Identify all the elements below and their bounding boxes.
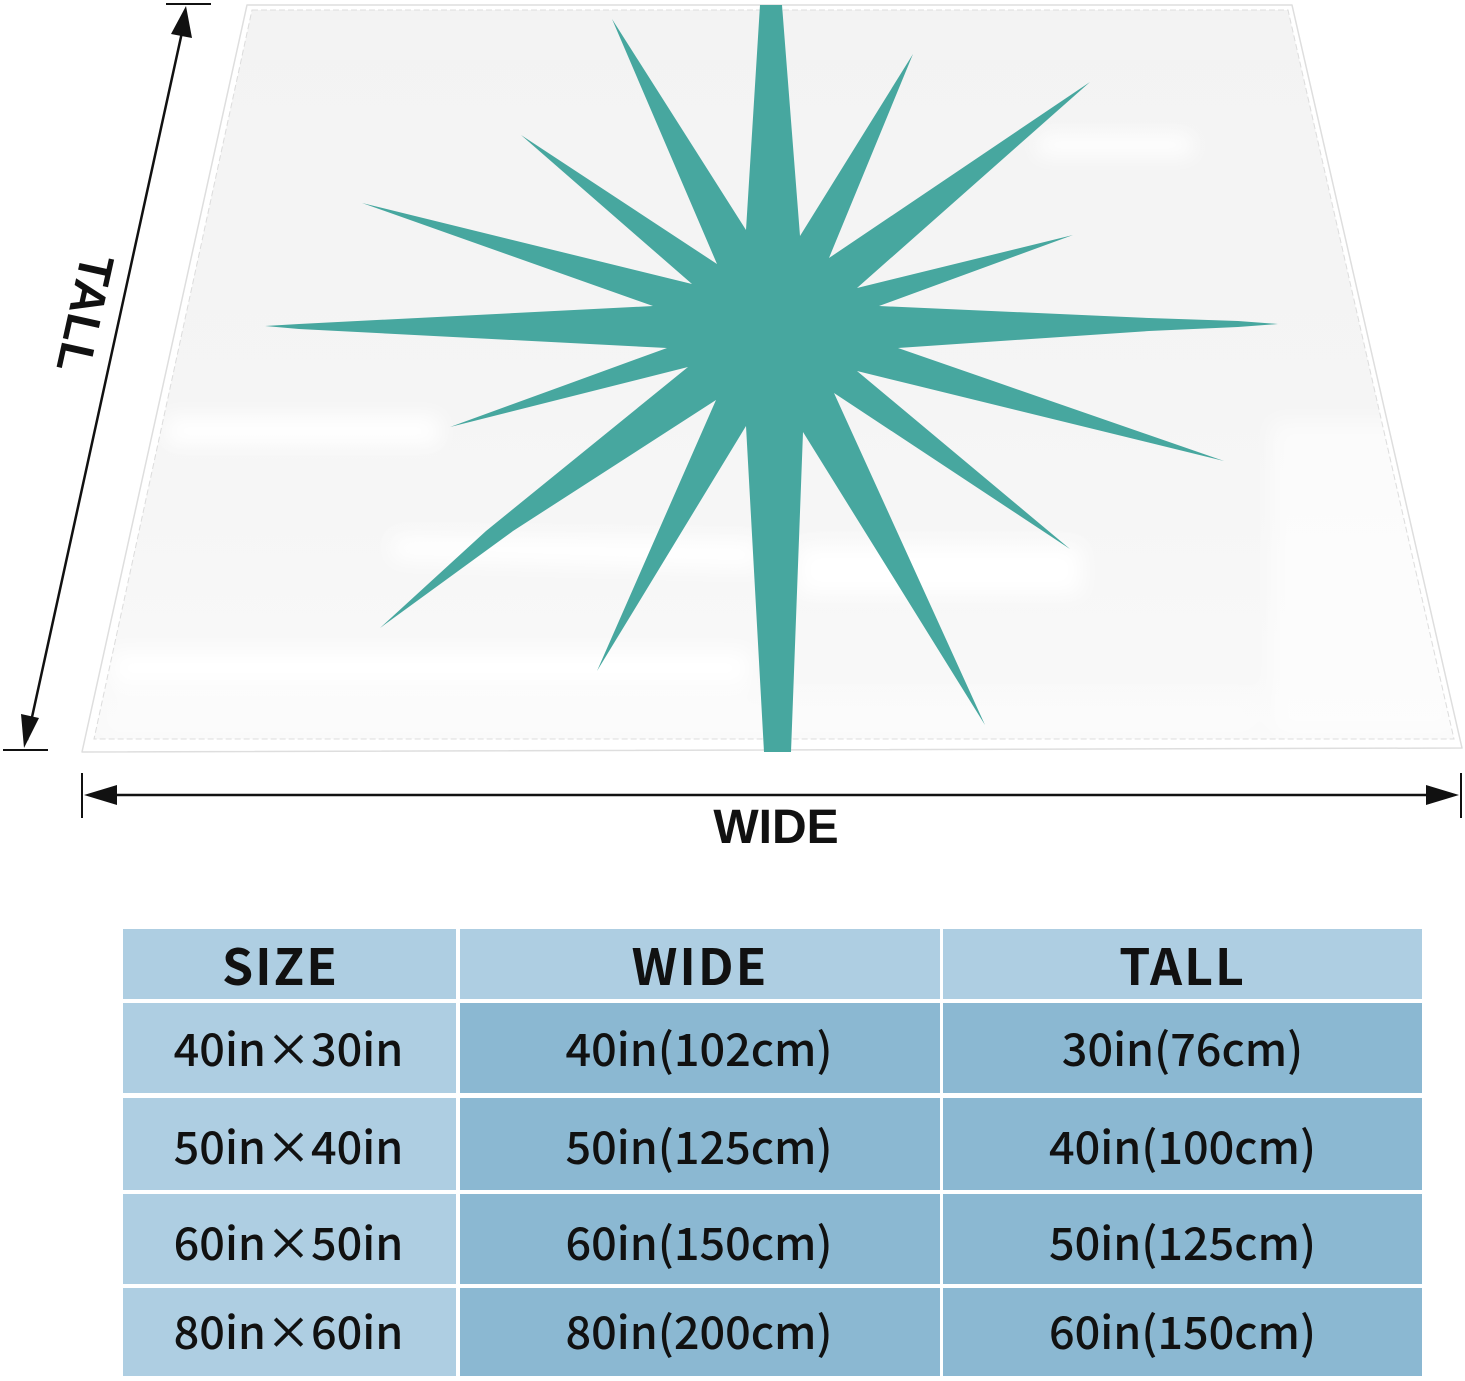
row 80x60: 80in(200cm) [565,1296,833,1362]
row 80x60: 60in(150cm) [1049,1296,1316,1362]
table header: WIDE [632,928,768,1000]
row 40x30 [123,1003,1422,1093]
table header [123,928,1422,1000]
blanket with starburst and dimension arrows [3,3,1463,854]
blanket [82,5,1462,752]
row 80x60: 80in×60in [174,1296,403,1362]
row 40x30: 30in(76cm) [1062,1014,1303,1078]
size table [123,928,1422,1376]
starburst [265,5,1278,752]
row 50x40: 50in×40in [174,1112,403,1176]
row 60x50: 60in×50in [174,1208,403,1272]
label: wide: WIDE [713,801,839,854]
row 50x40: 50in(125cm) [565,1112,833,1176]
table header: TALL [1119,928,1246,1000]
row 40x30: 40in×30in [174,1014,403,1078]
row 40x30: 40in(102cm) [565,1014,833,1078]
row 60x50 [123,1194,1422,1284]
table header: SIZE [222,928,339,1000]
row 50x40 [123,1098,1422,1190]
row 60x50: 60in(150cm) [565,1208,833,1272]
row 80x60 [123,1288,1422,1376]
wide arrow [82,773,1461,818]
tall arrow [3,4,211,750]
label: tall: TALL [45,250,123,377]
row 50x40: 40in(100cm) [1049,1112,1316,1176]
row 60x50: 50in(125cm) [1049,1208,1316,1272]
